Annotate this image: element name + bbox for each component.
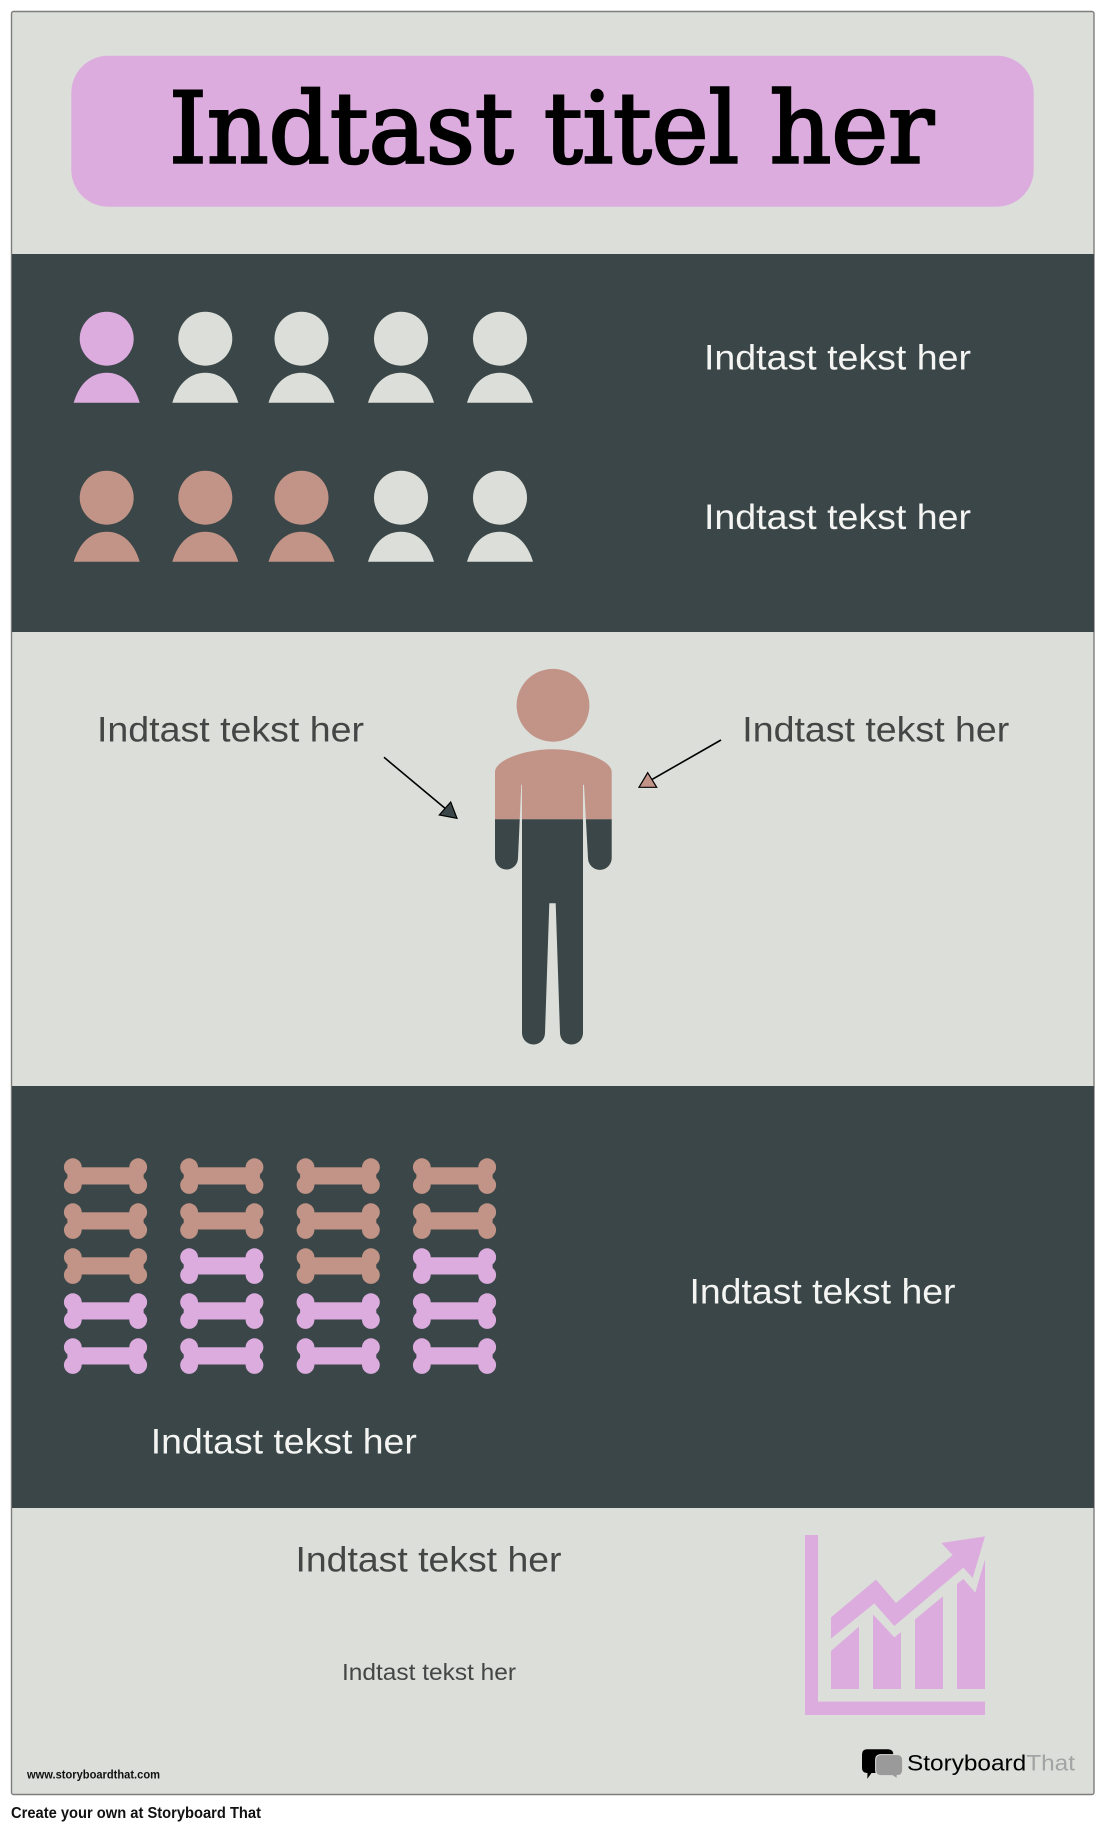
bone row 3 xyxy=(64,1248,496,1284)
icon row: three of five people highlighted xyxy=(74,471,533,562)
logo wordmark: Storyboard That xyxy=(907,1751,1075,1776)
text: left label: Indtast tekst her xyxy=(97,711,364,750)
panel: bottom section xyxy=(296,1535,985,1715)
arrow: right label to figure xyxy=(639,740,721,787)
text: bottom small note: Indtast tekst her xyxy=(342,1659,516,1685)
panel: title section xyxy=(71,56,1034,207)
text: second people row: Indtast tekst her xyxy=(704,498,971,537)
bone row 4 xyxy=(64,1293,496,1329)
bone row 2 xyxy=(64,1203,496,1239)
icon: rising bar chart with arrow xyxy=(805,1535,985,1715)
bone row 5 xyxy=(64,1338,496,1374)
icon: human figure split in two colours xyxy=(495,669,612,1044)
website url: www.storyboardthat.com xyxy=(26,1768,160,1782)
section background xyxy=(12,254,1094,632)
text: first people row: Indtast tekst her xyxy=(704,338,971,377)
title pill xyxy=(71,56,1034,207)
text: right of bones: Indtast tekst her xyxy=(690,1272,956,1311)
panel: human figure section xyxy=(97,669,1010,1044)
footer credit: Create your own at Storyboard That xyxy=(11,1805,261,1822)
logo: Storyboard That xyxy=(862,1749,1075,1779)
text: below bones: Indtast tekst her xyxy=(151,1422,417,1461)
icon row: one of five people highlighted xyxy=(74,312,533,403)
panel: people section xyxy=(12,254,1094,632)
text: right label: Indtast tekst her xyxy=(742,711,1010,750)
text: bottom heading: Indtast tekst her xyxy=(296,1541,562,1580)
arrow: left label to figure xyxy=(384,757,457,818)
bone row 1 xyxy=(64,1158,496,1194)
panel: bones section xyxy=(12,1086,1094,1508)
icon grid: bones xyxy=(64,1158,496,1374)
icon: speech bubbles xyxy=(862,1749,903,1779)
title: Indtast titel her xyxy=(169,72,934,186)
section background xyxy=(12,1086,1094,1508)
